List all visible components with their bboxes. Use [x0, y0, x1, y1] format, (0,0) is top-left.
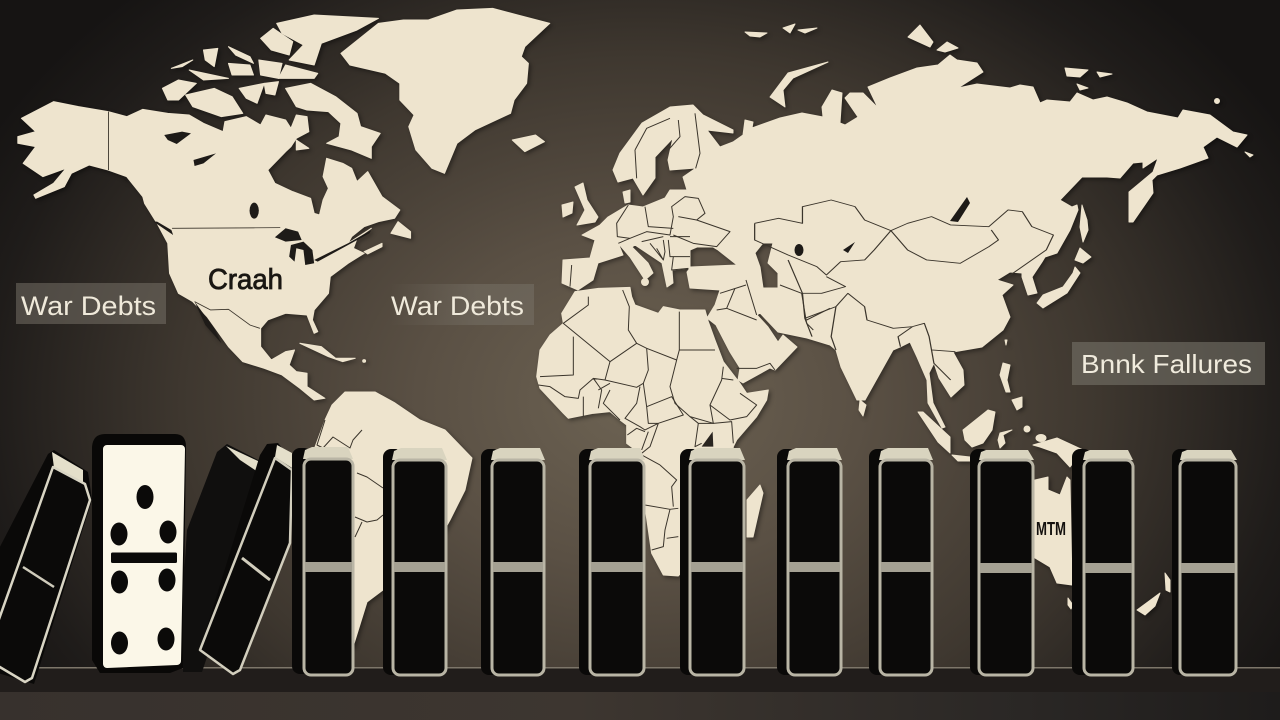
map: Eurasia borders, Asia: [755, 200, 1053, 380]
map: Africa: [537, 287, 768, 576]
domino 7: upright: [481, 448, 545, 675]
label: Crash on North America: Craah: [208, 264, 283, 296]
lakes: [120, 132, 371, 343]
label: glyphs on Australia: MTM: [1036, 519, 1066, 539]
map: lakes of Asia: [794, 197, 970, 256]
domino 11: upright: [869, 448, 933, 675]
domino 8: upright: [579, 448, 645, 675]
label: War Debts centre: [390, 284, 534, 325]
label: Bank Failures: Bnnk Fallures: [1081, 349, 1252, 379]
map: Japan and Sakhalin: [1037, 205, 1091, 308]
domino 4: falling dark: [200, 443, 292, 674]
map: Greenland and Iceland: [341, 8, 550, 173]
map: South America: [312, 392, 472, 647]
map: Tasmania: [1068, 598, 1073, 609]
map: Eurasia borders, Middle East: [717, 280, 830, 370]
map: Madagascar: [747, 485, 763, 537]
domino 9: upright: [680, 448, 745, 675]
label: War Debts left: [16, 283, 166, 324]
domino 1: falling: [0, 450, 92, 684]
label: War Debts centre: War Debts: [391, 291, 524, 321]
map: New Zealand: [1137, 573, 1170, 615]
map: Eurasia borders, Europe: [570, 113, 730, 287]
map: Eurasia: [562, 55, 1247, 428]
domino 14: upright: [1172, 449, 1237, 675]
floor band: [0, 667, 1280, 720]
borders: [109, 112, 280, 328]
domino 10: upright: [777, 448, 842, 675]
domino 12: upright: [970, 449, 1034, 675]
map: North America: [18, 15, 411, 400]
map: European and Arctic islands: [562, 24, 1253, 286]
label: Bank Failures: [1072, 342, 1265, 385]
domino 3: falling dark: [183, 444, 266, 672]
domino 13: upright: [1072, 449, 1133, 675]
domino 6: upright: [383, 448, 447, 675]
map: Southeast Asian islands: [859, 340, 1083, 467]
map: Australia: [1035, 477, 1072, 585]
domino 5: upright: [292, 447, 353, 675]
label: War Debts left: War Debts: [21, 291, 156, 321]
domino 2: white face with pips: [92, 434, 186, 673]
